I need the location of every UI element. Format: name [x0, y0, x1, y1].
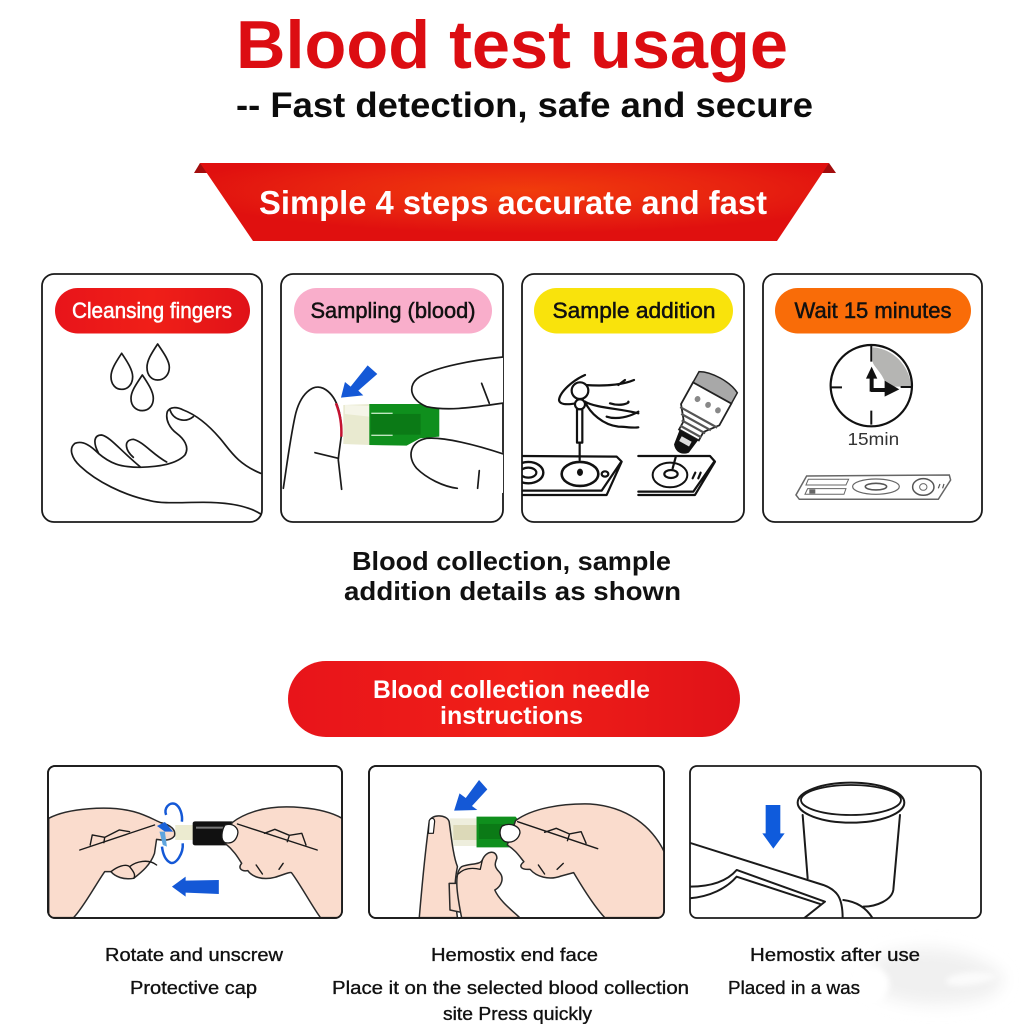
- banner: simple 4 steps: [194, 163, 836, 241]
- icon: water drops and hand: [71, 344, 261, 514]
- captions: middle step: site Press quickly: [443, 1004, 592, 1024]
- captions: middle step: [332, 945, 689, 1024]
- label: sampling: Sampling (blood): [310, 298, 476, 323]
- illustration: waste cup and tray: [689, 783, 904, 918]
- title: Blood test usage: [236, 7, 788, 83]
- label: sample addition: [534, 288, 733, 334]
- captions: right step: Placed in a was: [728, 978, 860, 998]
- icon: pipette and dropper bottle over test cassettes: [513, 368, 740, 495]
- text: blood collection note: addition details as shown: [344, 576, 681, 606]
- panel: sample addition: [513, 274, 744, 522]
- label: sample addition: Sample addition: [552, 298, 716, 323]
- label: sampling: [294, 288, 492, 334]
- captions: left step: Protective cap: [130, 978, 257, 998]
- panel: dispose in waste: [689, 766, 981, 918]
- icon: clock and test cassette: 15min: [847, 429, 899, 449]
- label: wait 15 minutes: [775, 288, 971, 334]
- label: wait 15 minutes: Wait 15 minutes: [794, 298, 952, 323]
- heading pill: blood collection needle instructions: [288, 661, 740, 737]
- captions: right step: [728, 945, 920, 998]
- panel: rotate and unscrew: [48, 766, 342, 918]
- captions: left step: Rotate and unscrew: [105, 945, 284, 965]
- icon: lancet on finger: [283, 357, 507, 493]
- captions: right step: Hemostix after use: [750, 945, 920, 965]
- heading pill: blood collection needle instructions: instructions: [440, 702, 583, 730]
- captions: middle step: Place it on the selected blood collection: [332, 978, 689, 998]
- subtitle: -- Fast detection, safe and secure: [236, 86, 813, 125]
- panel: wait 15 minutes: [763, 274, 982, 522]
- captions: left step: [105, 945, 284, 998]
- panel: place on site: [369, 766, 665, 918]
- label: cleansing fingers: Cleansing fingers: [72, 298, 232, 323]
- panel: cleansing fingers: [42, 274, 262, 522]
- text: blood collection note: [344, 546, 681, 606]
- panel: sampling blood: [281, 274, 507, 522]
- banner: simple 4 steps: Simple 4 steps accurate and fast: [259, 184, 767, 221]
- illustration: hands unscrewing cap: [49, 804, 342, 918]
- captions: middle step: Hemostix end face: [431, 945, 598, 965]
- icon: clock and test cassette: [796, 345, 951, 499]
- label: cleansing fingers: [55, 288, 250, 334]
- smudge over caption: [857, 948, 1002, 1004]
- text: blood collection note: Blood collection, sample: [352, 546, 671, 576]
- illustration: hemostix on finger: [419, 780, 665, 918]
- heading pill: blood collection needle instructions: Blood collection needle: [373, 676, 650, 704]
